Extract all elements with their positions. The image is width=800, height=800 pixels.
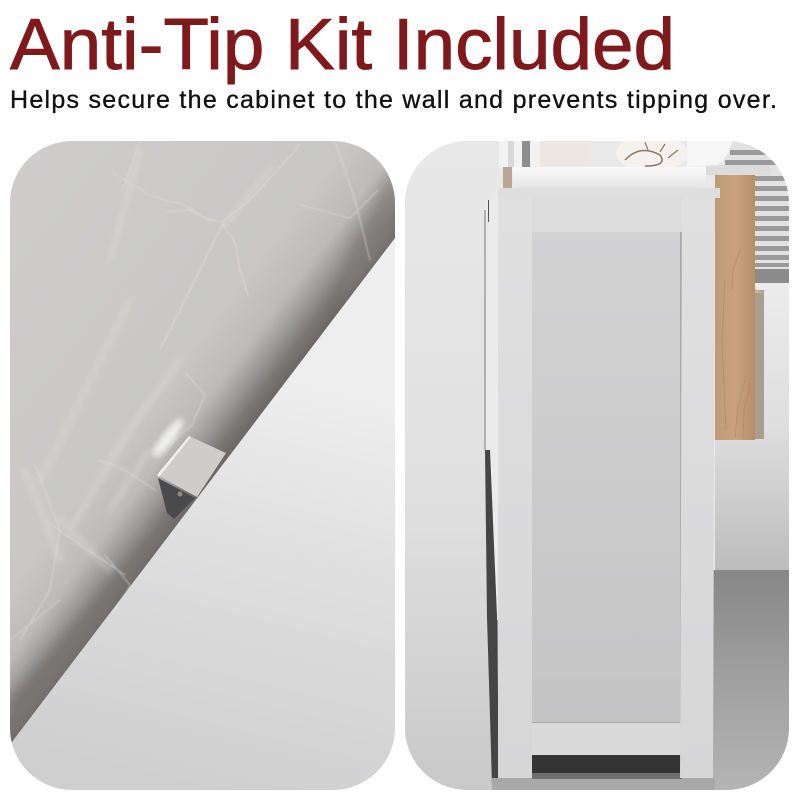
- wall: [405, 141, 499, 790]
- panel: cabinet installed against wall: [405, 135, 789, 792]
- bottom rail: [532, 723, 682, 755]
- cabinet left stile: [498, 198, 532, 778]
- floor: [490, 570, 789, 790]
- floor under cabinet: [492, 778, 715, 790]
- towel roll: [616, 141, 688, 167]
- backsplash and tile: [498, 141, 540, 167]
- title: Anti-Tip Kit Included: [10, 5, 675, 85]
- toe kick: [532, 755, 682, 773]
- subtitle: Helps secure the cabinet to the wall and prevents tipping over.: [10, 86, 777, 114]
- wall gap shadow: [484, 210, 486, 450]
- cabinet door panel: [532, 232, 680, 722]
- vessel sink back: [687, 141, 733, 167]
- white cabinet surface: [10, 238, 395, 790]
- cabinet side sliver: [495, 570, 498, 620]
- vanity counter and sink: [498, 167, 720, 198]
- radiator stripes: [725, 141, 789, 283]
- top rail: [532, 198, 682, 232]
- anti-tip bracket: [149, 415, 226, 519]
- panel: anti-tip bracket close-up: [10, 141, 395, 790]
- marble veins: [10, 141, 378, 640]
- marble wall: [10, 141, 395, 745]
- back wall: [715, 397, 789, 570]
- wooden vanity: [706, 165, 764, 440]
- background room: [487, 141, 725, 570]
- cabinet right stile: [680, 198, 715, 778]
